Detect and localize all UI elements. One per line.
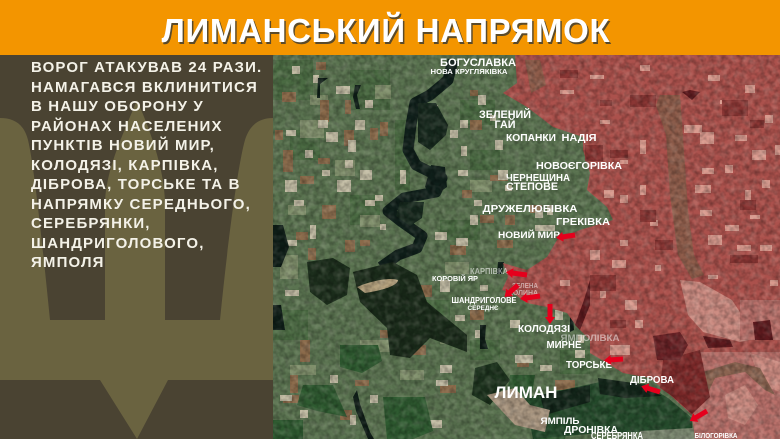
label: Лиман: ЛИМАН (494, 383, 558, 402)
label: Чернещина: ЧЕРНЕЩИНА (506, 173, 570, 184)
text block: НАМАГАВСЯ ВКЛИНИТИСЯ (31, 79, 258, 96)
text block: КОЛОДЯЗІ, КАРПІВКА, (31, 157, 219, 174)
label: Греківка: ГРЕКІВКА (556, 217, 610, 228)
icon: trident watermark (0, 100, 273, 439)
label: Нова Кругляківка: НОВА КРУГЛЯКІВКА (430, 67, 508, 76)
label: Ямполівка: ЯМПОЛІВКА (560, 333, 620, 344)
arrow: Novyi Myr (562, 235, 575, 237)
label: Зелена: ЗЕЛЕНА (512, 281, 538, 290)
place labels (430, 57, 738, 439)
text block: ДІБРОВА, ТОРСЬКЕ ТА В (31, 176, 241, 193)
label: Новоєгорівка: НОВОЄГОРІВКА (536, 160, 622, 172)
panel: summary text (0, 55, 273, 439)
text block: НАПРЯМКУ СЕРЕДНЬОГО, (31, 196, 251, 213)
text block: ПУНКТІВ НОВИЙ МИР, (31, 137, 215, 154)
river and reservoir (381, 60, 453, 267)
arrow: Zelena Dolyna (509, 285, 518, 293)
label: Ямпіль: ЯМПІЛЬ (540, 416, 580, 426)
text block: СЕРЕБРЯНКИ, (31, 215, 151, 232)
attack arrows (509, 235, 707, 418)
arrow: Kolodiazi (548, 304, 552, 318)
text block: ВОРОГ АТАКУВАВ 24 РАЗИ. (31, 59, 262, 76)
label: Дронівка: ДРОНІВКА (564, 425, 618, 436)
label: Надія: НАДІЯ (562, 133, 596, 144)
text block: ШАНДРИГОЛОВОГО, (31, 235, 205, 252)
label: Карпівка: КАРПІВКА (470, 267, 508, 276)
label: Середнє: СЕРЕДНЄ (468, 305, 499, 312)
label: Колодязі: КОЛОДЯЗІ (518, 324, 570, 335)
header bar (0, 0, 780, 55)
map (273, 55, 780, 439)
arrow: Karpivka (512, 273, 527, 275)
label: Діброва: ДІБРОВА (630, 375, 674, 386)
label: Степове: СТЕПОВЕ (506, 181, 558, 193)
texture overlay (273, 55, 780, 439)
label: Дружелюбівка: ДРУЖЕЛЮБІВКА (482, 203, 578, 215)
label: Коровій Яр: КОРОВІЙ ЯР (432, 274, 478, 283)
label: Торське: ТОРСЬКЕ (566, 360, 612, 371)
forest blocks (307, 258, 695, 439)
text block: ЯМПОЛЯ (31, 254, 105, 271)
text block: В НАШУ ОБОРОНУ У (31, 98, 204, 115)
text block: РАЙОНАХ НАСЕЛЕНИХ (31, 118, 223, 135)
occupied territory overlay (502, 55, 780, 439)
arrow: Torske (610, 359, 623, 360)
arrow: Bilohorivka (695, 411, 707, 418)
label: Гай: ГАЙ (494, 118, 516, 131)
label: Копанки: КОПАНКИ (506, 133, 556, 144)
title: ЛИМАНСЬКИЙ НАПРЯМОК (162, 12, 610, 49)
label: Богуславка: БОГУСЛАВКА (440, 57, 516, 69)
arrow: Dibrova (647, 388, 660, 392)
arrow: Shandryholove (526, 296, 540, 298)
label: Новий Мир: НОВИЙ МИР (498, 229, 561, 241)
satellite base: green fields (273, 55, 780, 439)
label: Долина: ДОЛИНА (508, 288, 539, 297)
text block (31, 59, 262, 271)
label: Мирне: МИРНЕ (546, 340, 582, 351)
label: Зелений: ЗЕЛЕНИЙ (479, 108, 531, 121)
label: Шандриголове: ШАНДРИГОЛОВЕ (452, 296, 517, 305)
sand near Lyman (487, 388, 550, 432)
